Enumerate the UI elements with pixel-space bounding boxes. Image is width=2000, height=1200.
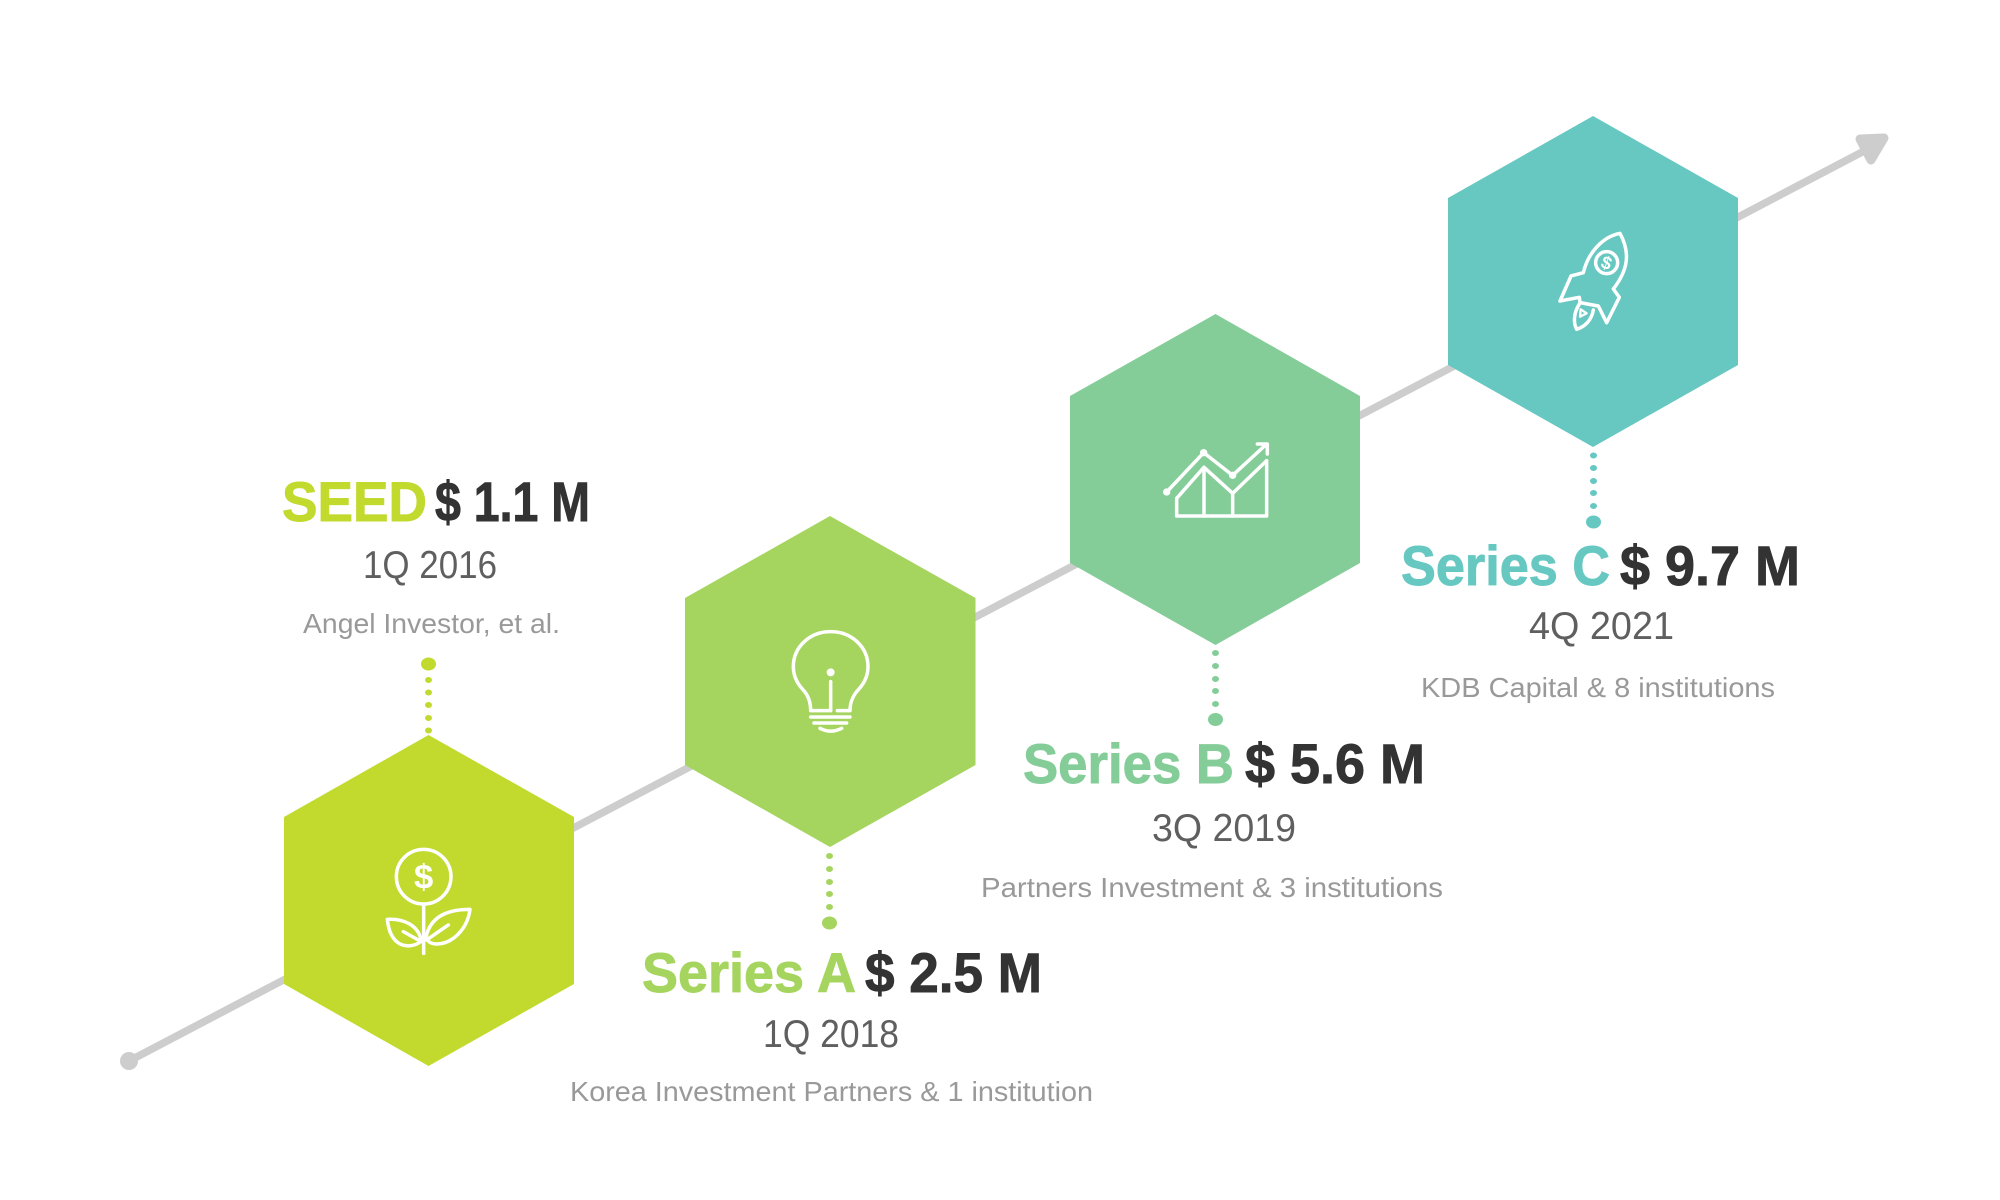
heading: series B amount: $ 5.6 M xyxy=(1245,732,1425,795)
heading: series A amount: Series A xyxy=(642,941,856,1004)
icon: money plant xyxy=(387,849,470,953)
heading: series B amount xyxy=(1023,732,1425,795)
heading: series B amount: Series B xyxy=(1023,732,1234,795)
heading: series C amount: Series C xyxy=(1401,534,1610,597)
date: seed: 1Q 2016 xyxy=(363,544,497,587)
hexagon: series C xyxy=(1448,116,1738,447)
panel: series C stage xyxy=(1401,116,1800,703)
connector dots: series C xyxy=(1586,452,1601,528)
hexagon: series B xyxy=(1070,314,1360,645)
date: series A: 1Q 2018 xyxy=(763,1013,899,1056)
heading: series C amount xyxy=(1401,534,1800,597)
hexagon: series A xyxy=(685,516,976,847)
icon: growth chart xyxy=(1163,444,1267,516)
icon: light bulb xyxy=(793,632,868,731)
investors: series B: Partners Investment & 3 institutions xyxy=(981,872,1443,903)
heading: seed amount: $ 1.1 M xyxy=(435,470,590,533)
investors: series C: KDB Capital & 8 institutions xyxy=(1421,672,1775,703)
date: series C: 4Q 2021 xyxy=(1529,605,1674,648)
heading: seed amount: SEED xyxy=(282,470,427,533)
heading: series C amount: $ 9.7 M xyxy=(1620,534,1800,597)
connector dots: series B xyxy=(1208,650,1223,726)
icon: money plant: $ xyxy=(414,859,433,897)
heading: series A amount xyxy=(642,941,1042,1004)
panel: series A stage xyxy=(570,516,1093,1107)
icon: rocket: $ xyxy=(1598,252,1615,274)
panel: seed stage xyxy=(282,470,590,1066)
heading: seed amount xyxy=(282,470,590,533)
date: series B: 3Q 2019 xyxy=(1152,807,1296,850)
hexagon: seed xyxy=(284,735,574,1066)
connector dots: series A xyxy=(822,853,837,930)
arrow: rising timeline xyxy=(120,138,1884,1070)
investors: seed: Angel Investor, et al. xyxy=(303,608,560,639)
icon: rocket xyxy=(1560,233,1626,329)
heading: series A amount: $ 2.5 M xyxy=(865,941,1042,1004)
connector dots: seed xyxy=(421,658,436,734)
investors: series A: Korea Investment Partners & 1 institution xyxy=(570,1076,1093,1107)
panel: series B stage xyxy=(981,314,1443,903)
